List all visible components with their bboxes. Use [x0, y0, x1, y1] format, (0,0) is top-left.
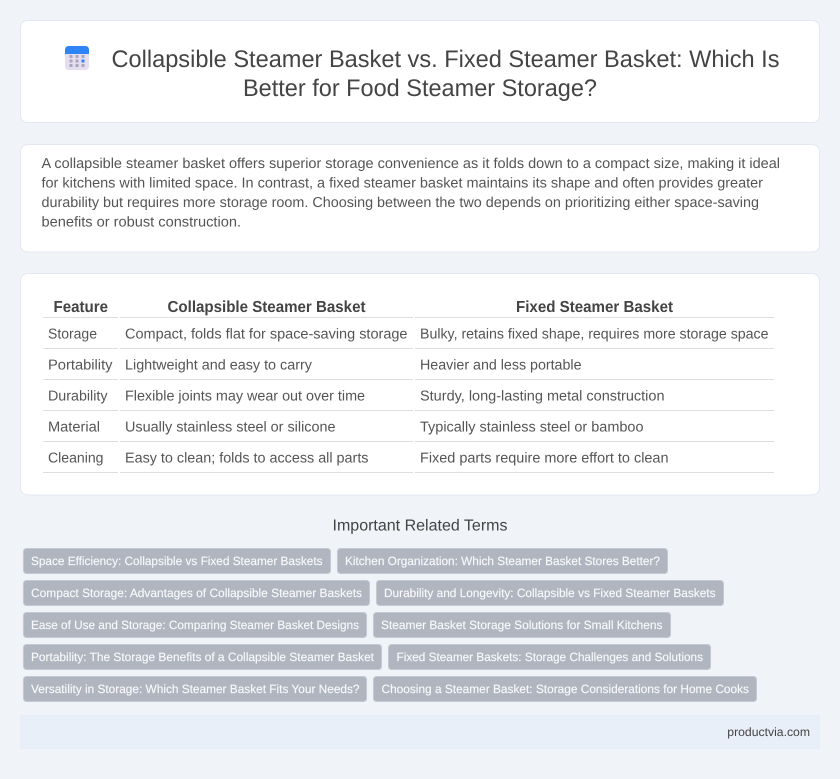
table row: storage — [43, 326, 774, 349]
table row: cleaning: Cleaning — [48, 450, 104, 466]
tag: portability — [24, 644, 382, 670]
table row: cleaning: Fixed parts require more effort to clean — [420, 450, 668, 466]
text block: introduction paragraph: for kitchens with limited space. In contrast, a fixed steamer basket maintains its shape and often provides greater — [42, 176, 763, 192]
tag: versatility — [24, 676, 366, 702]
table row: portability: Heavier and less portable — [420, 358, 582, 374]
tag: portability: Portability: The Storage Benefits of a Collapsible Steamer Basket — [31, 650, 375, 664]
tag: kitchen organization — [338, 548, 668, 574]
table row: portability: Lightweight and easy to carry — [125, 358, 313, 374]
icon: calendar — [65, 46, 89, 70]
related terms tags — [24, 548, 756, 702]
table row: material: Material — [48, 420, 100, 436]
table header row — [43, 299, 774, 318]
tag: choosing a steamer basket — [374, 676, 756, 702]
text block: introduction paragraph: benefits or robust construction. — [42, 214, 241, 230]
tag: storage solutions — [374, 612, 670, 638]
table row: durability: Durability — [48, 388, 108, 404]
table header row: Collapsible Steamer Basket — [168, 299, 366, 316]
tag: compact storage — [24, 580, 370, 606]
tag: durability and longevity — [376, 580, 724, 606]
footer: productvia.com — [727, 725, 810, 739]
footer — [20, 715, 820, 749]
table row: storage: Storage — [48, 326, 97, 342]
tag: ease of use: Ease of Use and Storage: Comparing Steamer Basket Designs — [31, 618, 359, 632]
panel: comparison table — [20, 274, 820, 495]
tag: choosing a steamer basket: Choosing a Steamer Basket: Storage Considerations for Home Cooks — [382, 682, 749, 696]
table row: cleaning: Easy to clean; folds to access all parts — [125, 450, 368, 466]
table row: cleaning — [43, 450, 774, 473]
tag: space efficiency — [24, 548, 330, 574]
table row: durability — [43, 388, 774, 411]
tag: kitchen organization: Kitchen Organization: Which Steamer Basket Stores Better? — [345, 554, 660, 568]
tag: fixed steamer baskets: Fixed Steamer Baskets: Storage Challenges and Solutions — [396, 650, 703, 664]
tag: compact storage: Compact Storage: Advantages of Collapsible Steamer Baskets — [31, 586, 362, 600]
table header row: Feature — [54, 299, 108, 316]
table header row: Fixed Steamer Basket — [516, 299, 674, 316]
tag: durability and longevity: Durability and Longevity: Collapsible vs Fixed Steamer Baskets — [384, 586, 716, 600]
header panel — [20, 20, 820, 122]
tag: fixed steamer baskets — [388, 644, 710, 670]
title: Collapsible Steamer Basket vs. Fixed Steamer Basket: Which Is — [112, 46, 780, 73]
text block: introduction paragraph — [42, 156, 780, 230]
tag: storage solutions: Steamer Basket Storage Solutions for Small Kitchens — [381, 618, 662, 632]
table row: material: Usually stainless steel or silicone — [125, 420, 336, 436]
panel: introduction — [20, 144, 820, 252]
table row: material — [43, 420, 774, 442]
table row: material: Typically stainless steel or bamboo — [420, 420, 644, 436]
table row: portability — [43, 358, 774, 380]
table row: storage: Compact, folds flat for space-saving storage — [125, 326, 408, 342]
title — [112, 46, 780, 102]
table row: durability: Flexible joints may wear out over time — [125, 388, 365, 404]
table row: storage: Bulky, retains fixed shape, requires more storage space — [420, 326, 768, 342]
tag: versatility: Versatility in Storage: Which Steamer Basket Fits Your Needs? — [31, 682, 360, 696]
heading: important related terms: Important Related Terms — [332, 518, 508, 534]
tag: ease of use — [24, 612, 366, 638]
tag: space efficiency: Space Efficiency: Collapsible vs Fixed Steamer Baskets — [31, 554, 322, 568]
table row: durability: Sturdy, long-lasting metal construction — [420, 388, 664, 404]
table row: portability: Portability — [48, 358, 113, 374]
text block: introduction paragraph: durability but requires more storage room. Choosing between the two depends on prioritizing either space-saving — [42, 195, 759, 211]
title: Better for Food Steamer Storage? — [243, 75, 597, 102]
text block: introduction paragraph: A collapsible steamer basket offers superior storage convenience as it folds down to a compact size, making it ideal — [42, 156, 780, 172]
